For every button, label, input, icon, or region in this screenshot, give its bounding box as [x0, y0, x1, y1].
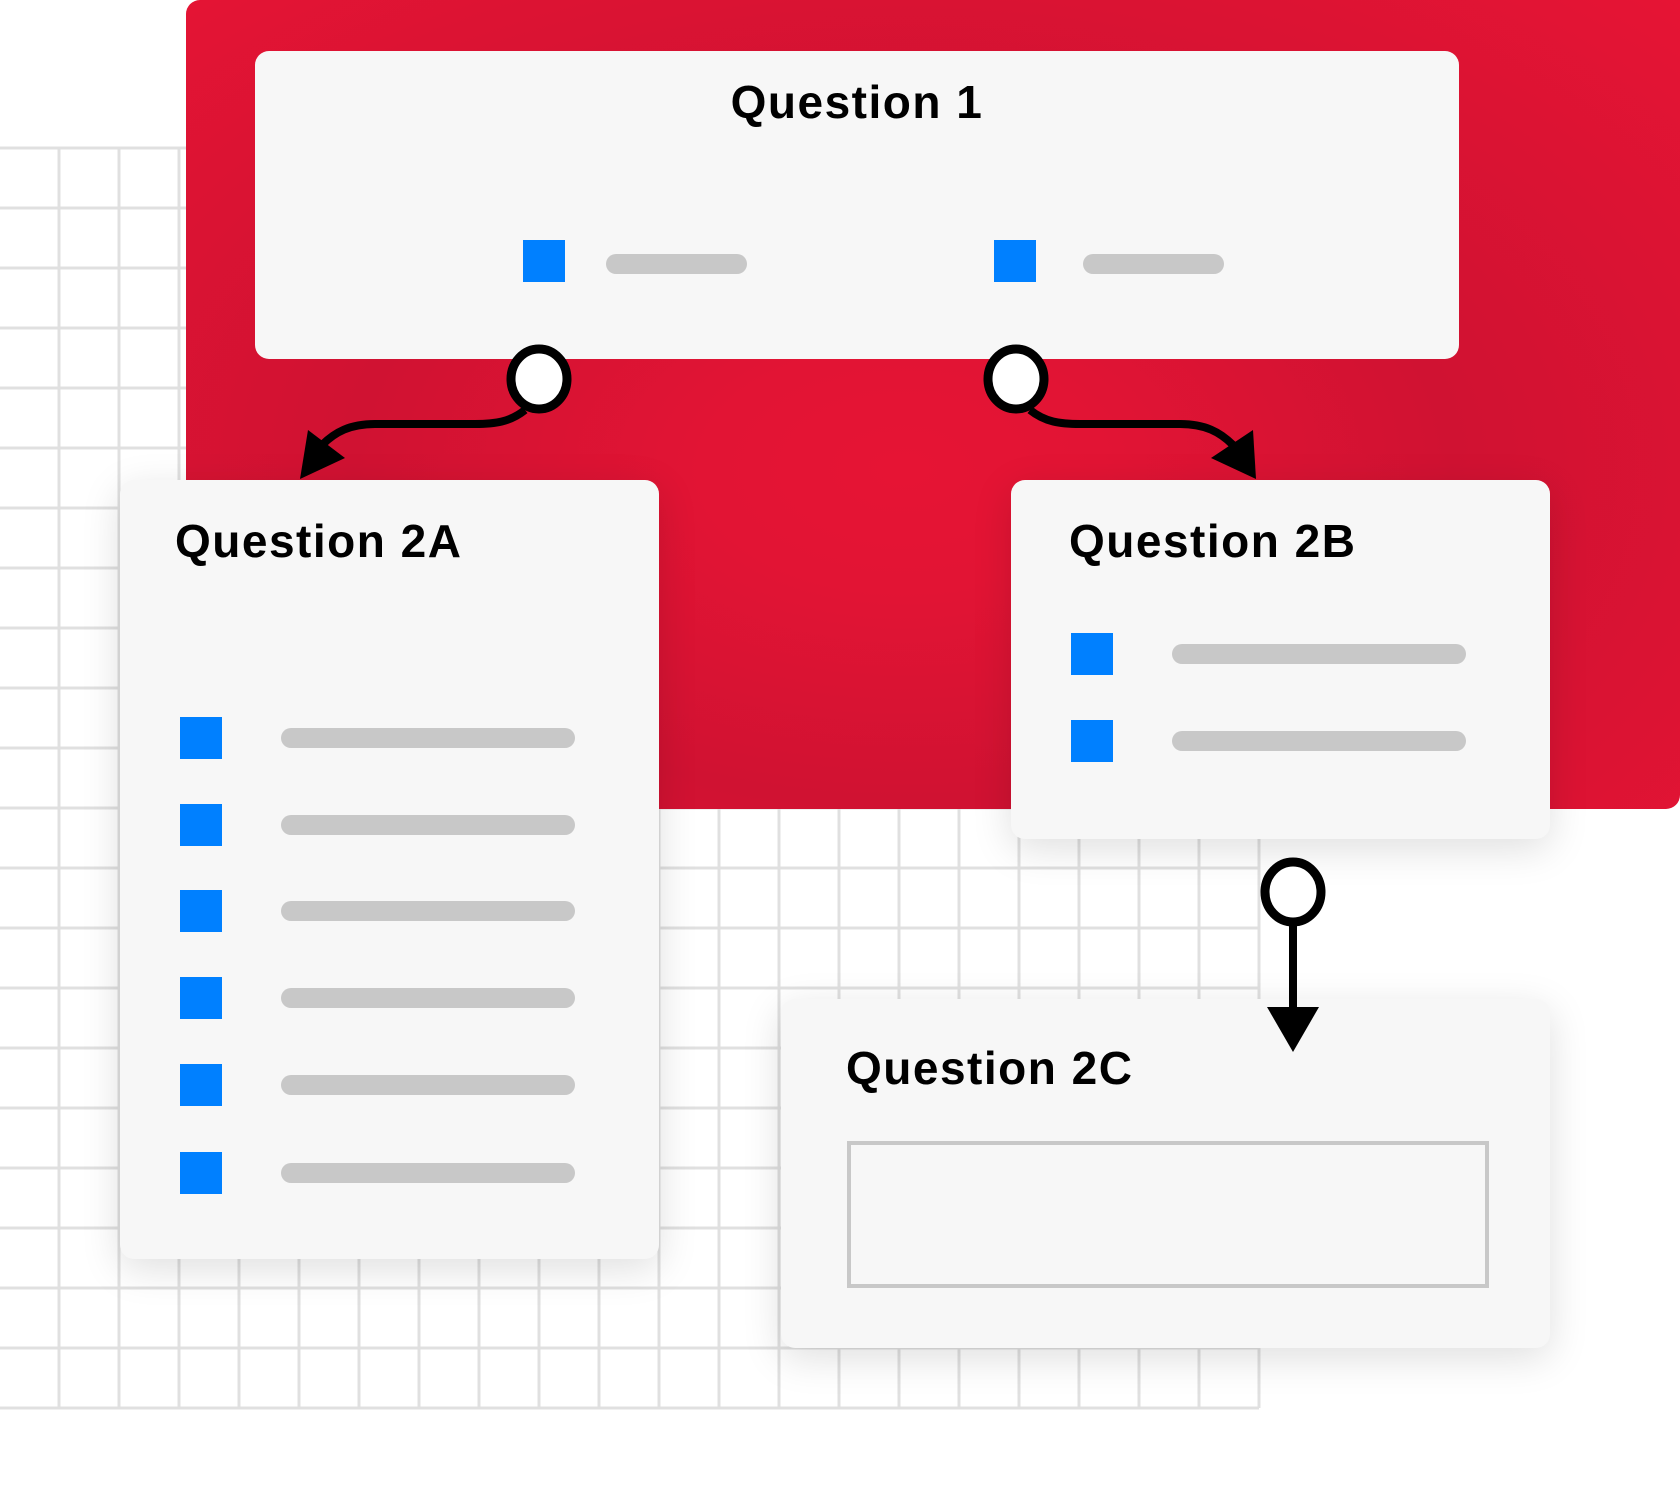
- arrow: Q1 to 2A: [300, 349, 567, 479]
- option 1: [523, 240, 747, 282]
- title: Question 2B: Question 2B: [1069, 515, 1356, 567]
- option list: [1071, 633, 1466, 762]
- title: Question 1: Question 1: [731, 76, 983, 128]
- title: Question 2C: Question 2C: [846, 1042, 1133, 1094]
- title: Question 2A: Question 2A: [175, 515, 462, 567]
- card: Question 1: [255, 51, 1459, 359]
- arrow: Q1 to 2B: [988, 349, 1256, 479]
- option list: [180, 717, 575, 1194]
- panel: red background: [186, 0, 1680, 809]
- option 2: [994, 240, 1224, 282]
- card: Question 2A: [120, 480, 659, 1259]
- card: Question 2C: [781, 999, 1550, 1348]
- text input box: [847, 1141, 1489, 1288]
- card: Question 2B: [1011, 480, 1550, 839]
- arrow: 2B to 2C: [1265, 862, 1321, 1052]
